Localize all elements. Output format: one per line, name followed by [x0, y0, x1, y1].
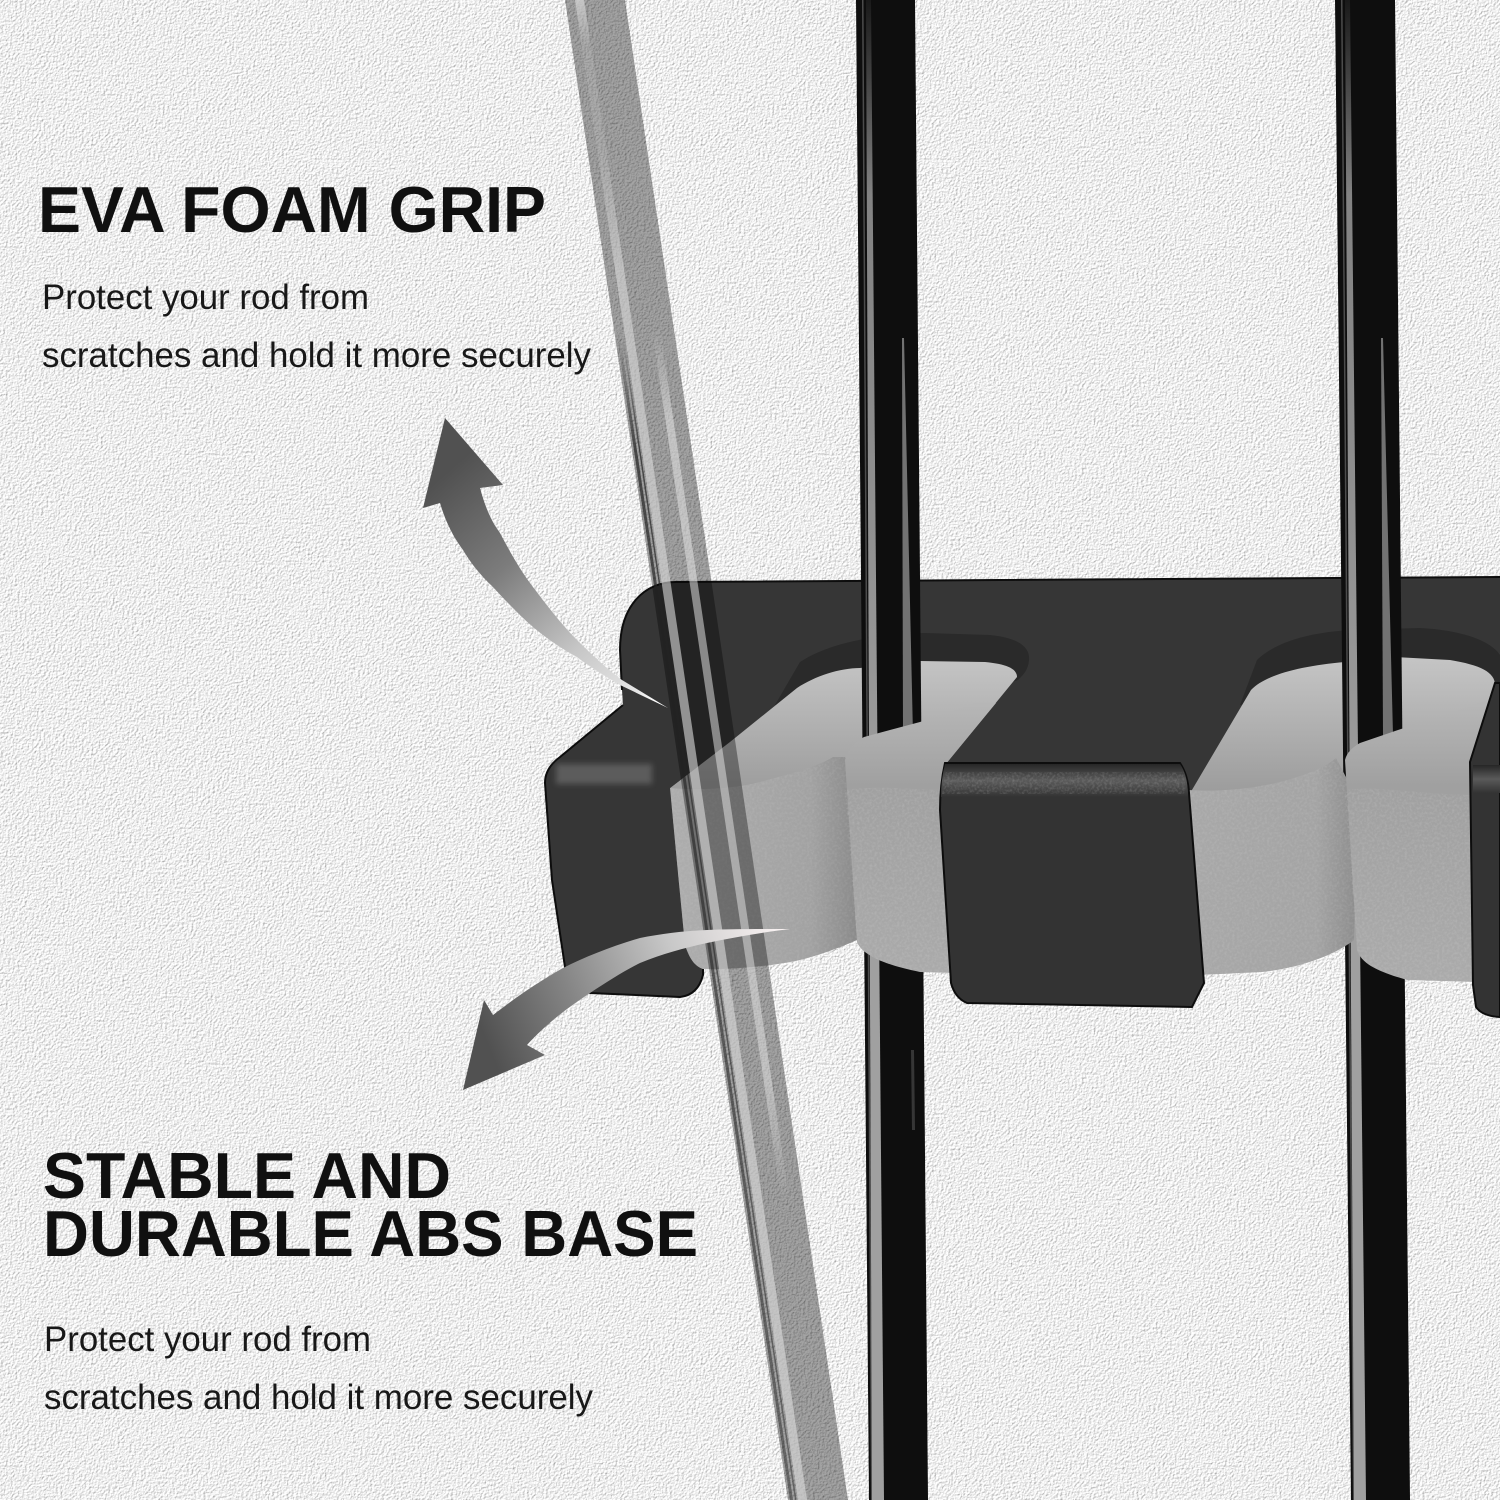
text block: foam grip description: [42, 278, 591, 375]
heading: EVA foam grip: EVA FOAM GRIP: [38, 173, 546, 246]
rod 2: [1335, 0, 1410, 1500]
translucent slanted rod: [565, 0, 848, 1500]
text block: base description: [44, 1320, 593, 1417]
rod 1: [856, 0, 928, 1500]
slot rim: second slot: [1240, 628, 1500, 705]
text block: base description: scratches and hold it more securely: [44, 1378, 593, 1417]
heading: stable and durable ABS base: STABLE AND: [43, 1139, 451, 1212]
base front block: right: [1470, 683, 1500, 1017]
heading: stable and durable ABS base: [43, 1139, 698, 1270]
arrow pointing up to the foam grip: [423, 418, 668, 708]
slot rim: first slot: [775, 633, 1029, 720]
foam lobe: second rod: [1345, 700, 1488, 982]
arrow pointing down to the ABS base: [463, 929, 790, 1090]
heading: stable and durable ABS base: DURABLE ABS BASE: [43, 1197, 698, 1270]
product: rod holder base with rods: [545, 0, 1500, 1500]
foam front: first segment: [670, 757, 860, 969]
base rear surface: [620, 577, 1500, 800]
foam top surface: first slot: [670, 661, 1017, 800]
foam lobe: first rod: [845, 703, 996, 973]
foam top surface: second slot: [1189, 657, 1495, 800]
foam front: second segment: [1189, 758, 1358, 975]
base front block: centre: [940, 763, 1204, 1007]
text block: base description: Protect your rod from: [44, 1320, 371, 1359]
base front block: left: [545, 700, 703, 997]
text block: foam grip description: scratches and hold it more securely: [42, 336, 591, 375]
base rear outline: [620, 577, 1500, 690]
text block: foam grip description: Protect your rod from: [42, 278, 369, 317]
